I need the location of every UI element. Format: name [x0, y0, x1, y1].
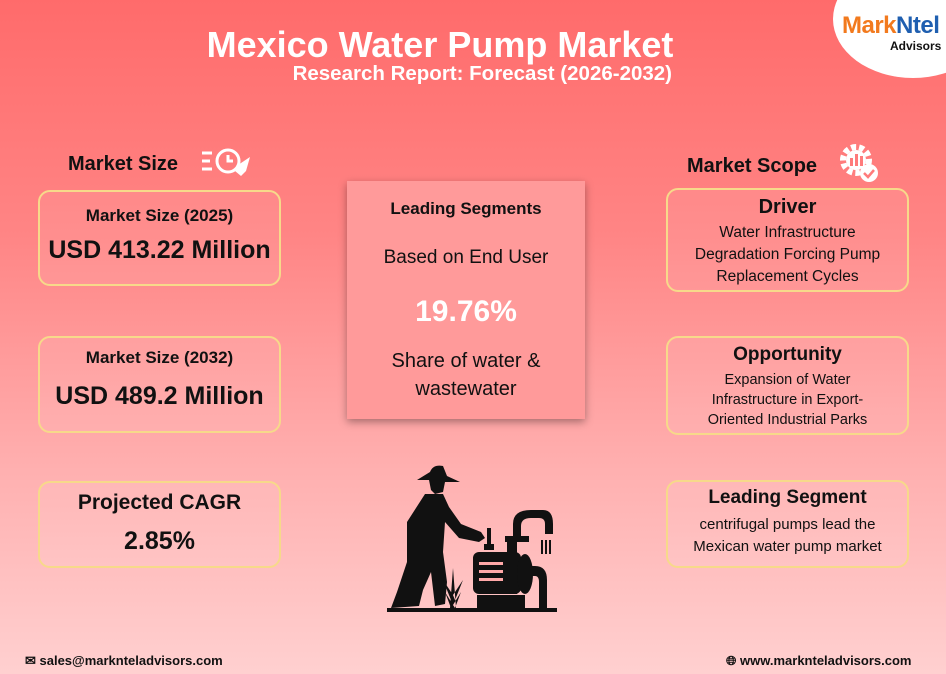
- box: driver: [666, 188, 909, 292]
- box: opportunity: Expansion of Water: [724, 372, 850, 388]
- box: market size 2032: USD 489.2 Million: [55, 382, 264, 410]
- box: CAGR: [38, 481, 281, 568]
- panel: leading segments: Based on End User: [384, 247, 548, 268]
- heading: market size: Market Size: [68, 153, 178, 175]
- box: opportunity: Infrastructure in Export-: [712, 392, 863, 408]
- panel: leading segments: [347, 181, 585, 419]
- box: CAGR: 2.85%: [124, 527, 195, 555]
- heading: market scope: Market Scope: [687, 155, 817, 177]
- box: opportunity: Opportunity: [733, 344, 842, 365]
- box: leading segment: centrifugal pumps lead the: [700, 516, 875, 533]
- box: market size 2025: [38, 190, 281, 286]
- box: leading segment: [666, 480, 909, 568]
- panel: leading segments: wastewater: [415, 378, 517, 400]
- subtitle: Research Report: Forecast (2026-2032): [293, 62, 672, 85]
- box: opportunity: [666, 336, 909, 435]
- logo: MarkNtel: [842, 12, 939, 39]
- logo: [833, 0, 946, 78]
- box: driver: Replacement Cycles: [716, 268, 859, 285]
- box: market size 2032: [38, 336, 281, 433]
- illustration: farmer with pump: [387, 466, 557, 612]
- logo: Advisors: [890, 39, 941, 53]
- footer: website: 🌐︎ www.marknteladvisors.com: [726, 653, 911, 668]
- box: market size 2032: Market Size (2032): [86, 348, 233, 367]
- box: driver: Water Infrastructure: [719, 224, 856, 241]
- box: leading segment: Mexican water pump market: [693, 538, 882, 555]
- box: leading segment: Leading Segment: [708, 487, 867, 508]
- box: market size 2025: USD 413.22 Million: [48, 236, 271, 264]
- box: opportunity: Oriented Industrial Parks: [708, 412, 867, 428]
- panel: leading segments: 19.76%: [415, 295, 517, 328]
- title: Mexico Water Pump Market: [207, 24, 673, 65]
- panel: leading segments: Leading Segments: [390, 199, 542, 218]
- box: CAGR: Projected CAGR: [78, 491, 241, 514]
- icon: clock rocket: [202, 148, 250, 176]
- box: driver: Driver: [759, 196, 816, 218]
- icon: gear check: [840, 144, 878, 182]
- box: market size 2025: Market Size (2025): [86, 206, 233, 225]
- box: driver: Degradation Forcing Pump: [695, 246, 880, 263]
- footer: email: ✉ sales@marknteladvisors.com: [25, 653, 223, 668]
- panel: leading segments: Share of water &: [392, 350, 540, 372]
